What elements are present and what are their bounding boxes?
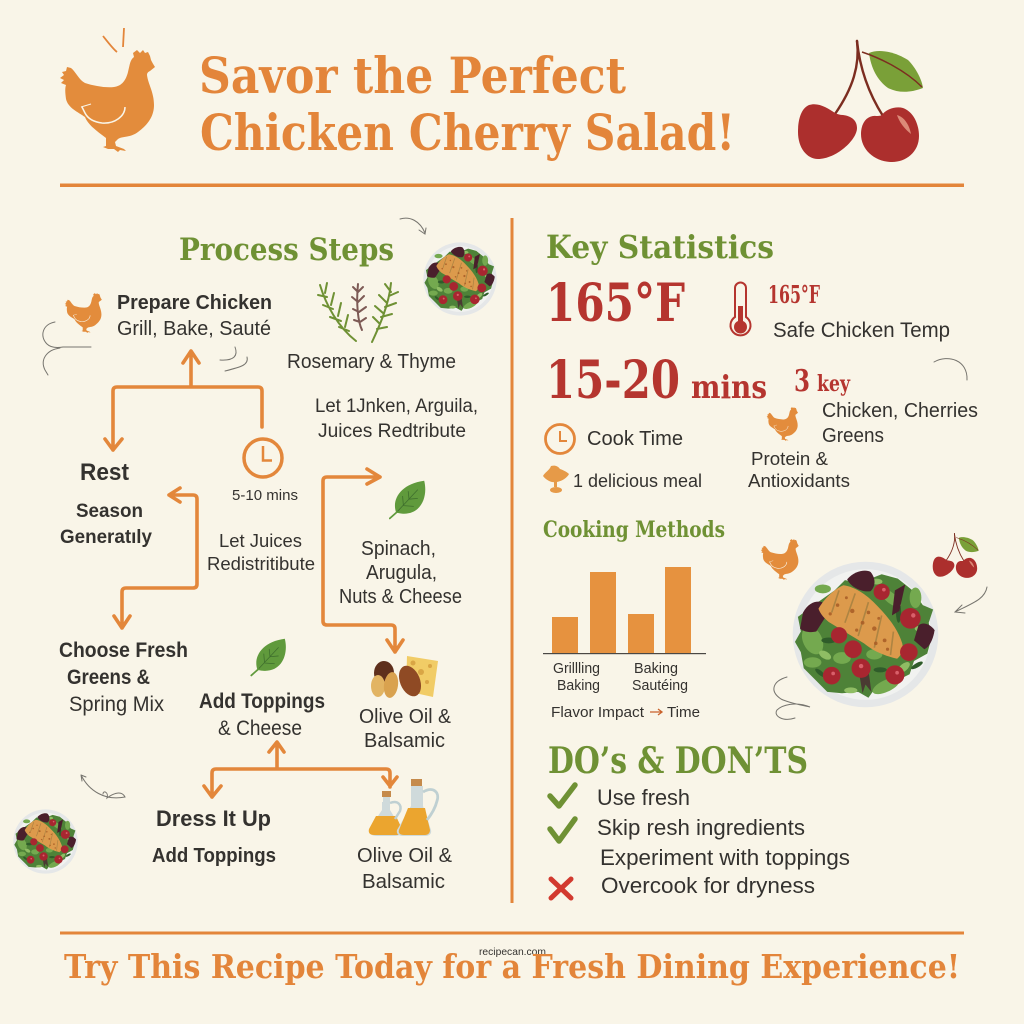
label: one delicious meal: 1 delicious meal (573, 471, 702, 491)
step: rest (60, 459, 152, 548)
header divider (60, 184, 964, 187)
text: key ingredients (822, 400, 978, 447)
stat: safe chicken temp (768, 280, 950, 342)
panel: process steps (13, 218, 497, 893)
icon: check two (550, 819, 575, 841)
text: let juices redistribute top (315, 396, 478, 442)
label: time: 5-10 mins (232, 488, 298, 504)
arrow: pointing to salad (955, 587, 987, 613)
text: key ingredients: Greens (822, 425, 884, 447)
stat: 165 F large: 165°F (546, 273, 685, 334)
stat: safe chicken temp: 165°F (768, 280, 820, 309)
icon: clock stat (546, 424, 574, 454)
text: let juices redistribute: Redistritibute (207, 554, 315, 574)
step: rest: Rest (80, 459, 129, 486)
icon: green leaf (251, 639, 286, 675)
decorative arc (934, 359, 967, 380)
step: choose fresh greens: Spring Mix (69, 693, 164, 716)
do: use fresh: Use fresh (597, 785, 690, 810)
decorative squiggle bottom (81, 775, 125, 798)
step: rest: Season (76, 501, 143, 522)
stat: 3 key: 3 (794, 364, 810, 399)
text: olive oil balsamic middle: Balsamic (364, 730, 445, 752)
arrows: rest to prepare chicken (105, 351, 262, 450)
icon: nuts and cheese (371, 656, 438, 700)
text: olive oil balsamic bottom: Olive Oil & (357, 845, 453, 867)
panel: cooking methods (543, 517, 987, 721)
step: prepare chicken: Prepare Chicken (117, 292, 272, 314)
bar chart: Grillling (553, 661, 600, 677)
arrows: to choose greens (114, 488, 197, 628)
icon: salad plate large (793, 562, 938, 707)
title: Savor the Perfect (199, 46, 626, 105)
icon: cross (551, 879, 571, 898)
icon: chicken stat (767, 407, 798, 441)
bar chart: Baking (634, 661, 678, 677)
icon: check one (550, 785, 575, 806)
icon: salad plate (423, 242, 497, 316)
step: add toppings: & Cheese (218, 717, 302, 740)
cooking methods heading: Cooking Methods (543, 517, 725, 543)
do: skip resh ingredients: Skip resh ingredients (597, 815, 805, 840)
arrows: to greens and nuts (323, 469, 403, 652)
footer call to action: Try This Recipe Today for a Fresh Dining Experience! (64, 947, 960, 986)
process steps heading: Process Steps (179, 232, 394, 268)
decorative squiggle (43, 322, 91, 375)
label: rosemary and thyme: Rosemary & Thyme (287, 351, 456, 373)
text: olive oil balsamic bottom: Balsamic (362, 871, 445, 893)
icon: chicken small (65, 293, 102, 333)
bar chart (543, 567, 706, 694)
text: let juices redistribute (207, 531, 315, 574)
icon: thermometer (731, 283, 750, 335)
step: prepare chicken (117, 292, 272, 340)
panel: dos and donts (548, 740, 850, 898)
step: add toppings (199, 690, 325, 740)
icon: rosemary and thyme (318, 283, 398, 342)
step: choose fresh greens: Choose Fresh (59, 639, 188, 662)
text: olive oil balsamic middle: Olive Oil & (359, 706, 452, 728)
chart caption: Time (667, 705, 700, 721)
stat: 3 key: key (817, 371, 851, 397)
stat: cook time value: 15-20 (546, 350, 680, 411)
title (199, 46, 735, 162)
icon: clock (244, 439, 282, 477)
key statistics heading: Key Statistics (546, 228, 774, 266)
text: let juices redistribute top: Juices Redtribute (318, 421, 466, 442)
icon: salad plate bottom (13, 809, 78, 874)
icon: oil bottles (369, 779, 438, 836)
footer divider (60, 932, 964, 934)
icon: chicken decorative (761, 539, 799, 580)
text: spinach arugula nuts cheese (339, 538, 462, 608)
text: protein and antioxidants (748, 448, 850, 491)
dont: overcook for dryness: Overcook for dryness (601, 873, 815, 898)
arrow: curved note (400, 218, 426, 234)
step: rest: Generatıly (60, 527, 152, 548)
label: cook time: Cook Time (587, 428, 683, 450)
dos and donts heading: DO’s & DON’TS (548, 740, 808, 782)
icon: cherries (798, 41, 923, 162)
text: let juices redistribute top: Let 1Jnken, Arguila, (315, 396, 478, 417)
bar chart: Sautéing (632, 678, 688, 694)
text: spinach arugula nuts cheese: Arugula, (366, 562, 437, 584)
stat: cook time value: mins (691, 368, 767, 406)
stat: 3 key (794, 364, 851, 399)
stat: safe chicken temp: Safe Chicken Temp (773, 319, 950, 342)
header (60, 28, 923, 162)
icon: chicken (60, 28, 155, 152)
text: let juices redistribute: Let Juices (219, 531, 302, 551)
text: key ingredients: Chicken, Cherries (822, 400, 978, 422)
title: Chicken Cherry Salad! (200, 103, 735, 162)
text: protein and antioxidants: Protein & (751, 448, 829, 469)
chart caption: Flavor Impact (551, 705, 644, 721)
icon: cherries small (933, 533, 979, 578)
step: prepare chicken: Grill, Bake, Sauté (117, 318, 271, 340)
arrows: dress it up branches (204, 742, 397, 797)
column divider (510, 218, 514, 903)
step: dress it up (152, 806, 276, 867)
text: spinach arugula nuts cheese: Nuts & Cheese (339, 586, 462, 608)
decorative squiggle (774, 677, 810, 719)
step: add toppings: Add Toppings (199, 690, 325, 713)
decorative squiggle two (220, 347, 247, 371)
step: dress it up: Add Toppings (152, 845, 276, 867)
bar chart: Baking (557, 678, 600, 694)
do: experiment with toppings: Experiment with toppings (600, 845, 850, 870)
chart caption (551, 705, 700, 721)
panel: key statistics (543, 228, 978, 493)
text: spinach arugula nuts cheese: Spinach, (361, 538, 436, 560)
text: protein and antioxidants: Antioxidants (748, 470, 850, 491)
step: dress it up: Dress It Up (156, 806, 271, 831)
icon: meal (543, 466, 569, 493)
icon: spinach leaf (390, 481, 425, 518)
step: choose fresh greens (59, 639, 188, 716)
watermark: recipecan.com (479, 947, 546, 958)
step: choose fresh greens: Greens & (67, 666, 150, 689)
text: olive oil balsamic bottom (357, 845, 453, 893)
text: olive oil balsamic middle (359, 706, 452, 752)
